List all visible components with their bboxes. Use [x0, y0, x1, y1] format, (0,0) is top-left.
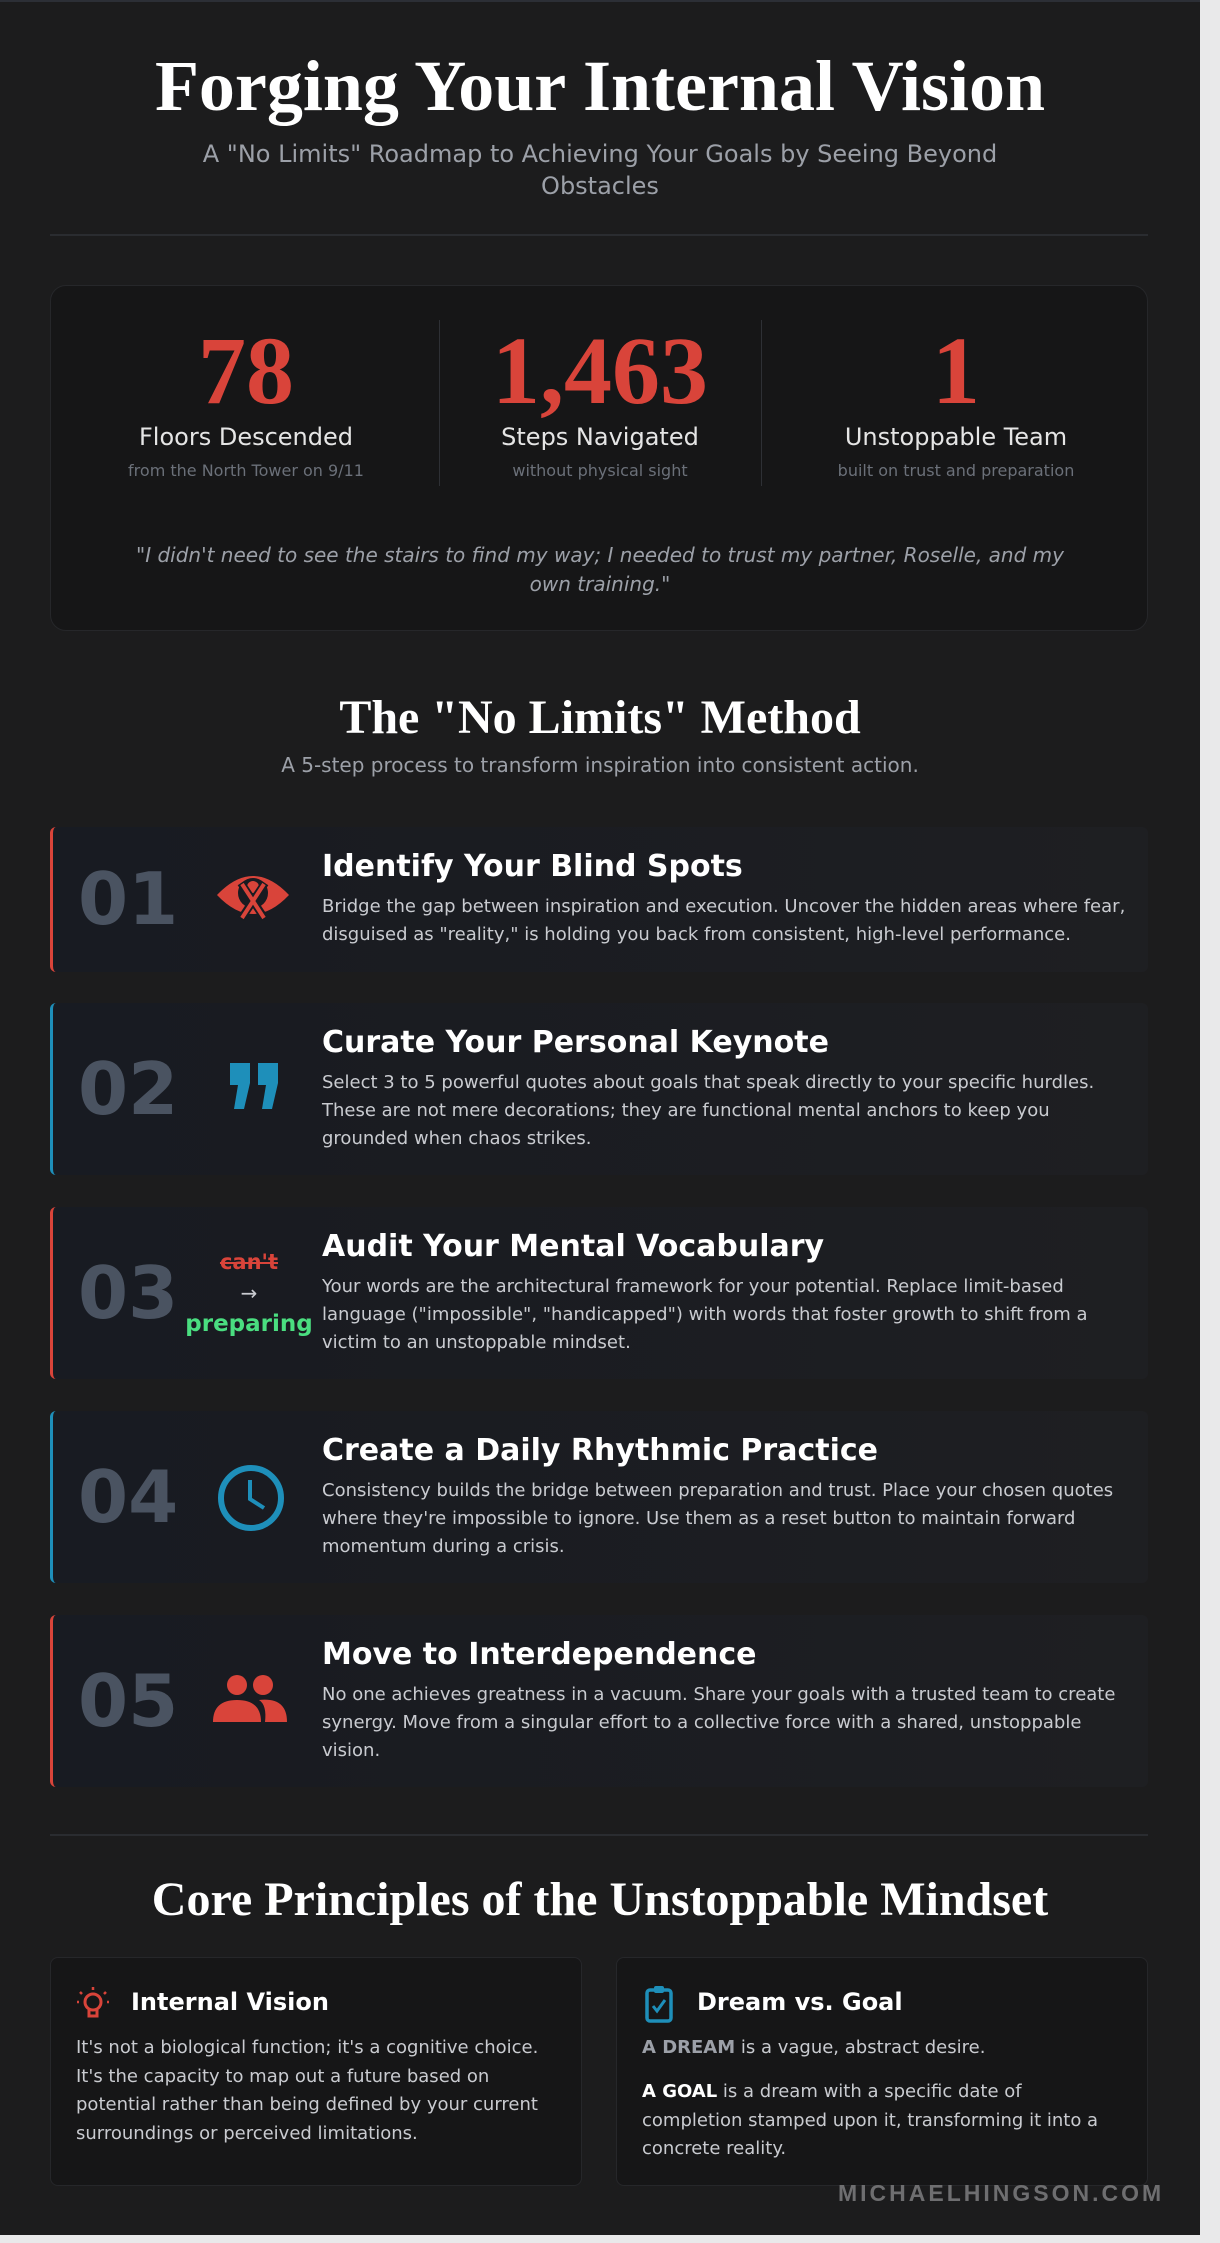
- title: Forging Your Internal Vision: [155, 46, 1045, 126]
- step 2: Curate Your Personal Keynote: [322, 1025, 829, 1060]
- panel: dream vs goal: Dream vs. Goal: [697, 1988, 903, 2016]
- icon: clock: [218, 1465, 284, 1531]
- step 3: [50, 1207, 1148, 1379]
- stat: 1 team: 1: [932, 317, 980, 424]
- panel: dream vs goal: [616, 1957, 1148, 2186]
- stat: 1 team: built on trust and preparation: [838, 461, 1074, 480]
- panel: stats: [50, 285, 1148, 631]
- step 5: Move to Interdependence: [322, 1637, 757, 1672]
- stat: 1 team: [838, 317, 1074, 480]
- panel: internal vision: [50, 1957, 582, 2186]
- quote: "I didn't need to see the stairs to find my way; I needed to trust my partner, Roselle, and my own training.": [136, 543, 1064, 596]
- icon: team: [213, 1675, 287, 1722]
- step 1: Identify Your Blind Spots: [322, 849, 743, 884]
- stat: 1,463 steps: Steps Navigated: [501, 423, 699, 451]
- step 1: 01: [78, 857, 178, 941]
- icon: clipboard: [645, 1986, 673, 2023]
- footer: website: MICHAELHINGSON.COM: [838, 2180, 1164, 2206]
- panel: internal vision: Internal Vision: [131, 1988, 329, 2016]
- stat: 1,463 steps: without physical sight: [512, 461, 688, 480]
- panel: internal vision: It's not a biological function; it's a cognitive choice. It's the capacity to map out a future based on potential rather than being defined by your current surroundings or perceived limitations.: [76, 2037, 538, 2144]
- stat: 1,463 steps: [492, 317, 708, 480]
- icon: lightbulb: [77, 1987, 109, 2018]
- step 2: 02: [78, 1047, 178, 1131]
- stat: 78 floors: Floors Descended: [139, 423, 353, 451]
- step 4: 04: [78, 1455, 178, 1539]
- step 2: [50, 1003, 1148, 1175]
- step 2: Select 3 to 5 powerful quotes about goals that speak directly to your specific hurdles. These are not mere decorations; they are functional mental anchors to keep you grounded when chaos strikes.: [322, 1072, 1094, 1149]
- step 4: Create a Daily Rhythmic Practice: [322, 1433, 878, 1468]
- step 3: 03: [78, 1251, 178, 1335]
- icon: quote: [230, 1063, 278, 1109]
- step 1: [50, 827, 1148, 972]
- icon: can't to preparing: preparing: [185, 1311, 313, 1337]
- heading: core principles: Core Principles of the Unstoppable Mindset: [152, 1873, 1048, 1926]
- subtitle: A "No Limits" Roadmap to Achieving Your Goals by Seeing Beyond Obstacles: [203, 140, 997, 200]
- stat: 78 floors: [128, 317, 364, 480]
- panel: dream vs goal: A GOAL is a dream with a specific date of completion stamped upon it, transforming it into a concrete reality.: [642, 2081, 1098, 2159]
- step 4: [50, 1411, 1148, 1583]
- stat: 78 floors: from the North Tower on 9/11: [128, 461, 364, 480]
- step 3: Audit Your Mental Vocabulary: [322, 1229, 824, 1264]
- step 5: No one achieves greatness in a vacuum. Share your goals with a trusted team to create synergy. Move from a singular effort to a collective force with a shared, unstoppable vision.: [322, 1684, 1115, 1761]
- icon: can't to preparing: can't: [220, 1250, 278, 1274]
- step 3: Your words are the architectural framework for your potential. Replace limit-based language ("impossible", "handicapped") with words that foster growth to shift from a victim to an unstoppable mindset.: [322, 1276, 1088, 1353]
- stat: 78 floors: 78: [198, 317, 294, 424]
- icon: blind spot: [217, 876, 289, 920]
- stat: 1 team: Unstoppable Team: [845, 423, 1067, 451]
- icon: can't to preparing: →: [241, 1281, 257, 1305]
- stat: 1,463 steps: 1,463: [492, 317, 708, 424]
- step 4: Consistency builds the bridge between preparation and trust. Place your chosen quotes where they're impossible to ignore. Use them as a reset button to maintain forward momentum during a crisis.: [322, 1480, 1113, 1557]
- method subtitle: A 5-step process to transform inspiration into consistent action.: [281, 753, 919, 777]
- icon: can't to preparing: [185, 1250, 313, 1337]
- step 1: Bridge the gap between inspiration and execution. Uncover the hidden areas where fear, disguised as "reality," is holding you back from consistent, high-level performance.: [322, 896, 1125, 945]
- step 5: 05: [78, 1659, 178, 1743]
- heading: method: The "No Limits" Method: [339, 691, 861, 744]
- panel: dream vs goal: A DREAM is a vague, abstract desire.: [642, 2037, 985, 2058]
- step 5: [50, 1615, 1148, 1787]
